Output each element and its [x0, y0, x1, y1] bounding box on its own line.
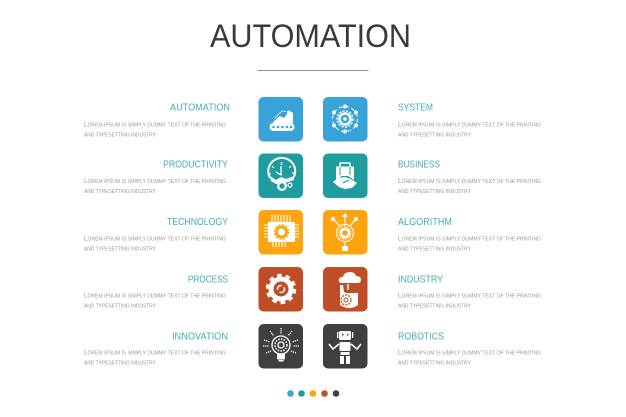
panel: technology text — [84, 216, 228, 252]
panel: technology text: TECHNOLOGY — [167, 216, 228, 228]
panel: technology text: LOREM IPSUM IS SIMPLY DUMMY TEXT OF THE PRINTING — [84, 236, 226, 242]
panel: process text: PROCESS — [188, 274, 228, 286]
panel: business text: LOREM IPSUM IS SIMPLY DUMMY TEXT OF THE PRINTING — [398, 178, 541, 185]
icon: conveyor automation — [258, 97, 303, 142]
panel: innovation text: INNOVATION — [172, 330, 228, 342]
panel: industry text — [398, 274, 541, 310]
panel: robotics text: LOREM IPSUM IS SIMPLY DUMMY TEXT OF THE PRINTING — [398, 350, 541, 356]
panel: innovation text: AND TYPESETTING INDUSTRY — [84, 360, 156, 366]
panel: technology text: AND TYPESETTING INDUSTRY — [84, 246, 156, 252]
panel: system text: AND TYPESETTING INDUSTRY — [398, 132, 471, 138]
panel: productivity text — [84, 158, 228, 195]
panel: industry text: INDUSTRY — [398, 274, 443, 286]
panel: business text — [398, 158, 541, 195]
panel: process text: LOREM IPSUM IS SIMPLY DUMMY TEXT OF THE PRINTING — [84, 292, 226, 300]
icon: process gear — [258, 267, 303, 312]
panel: robotics text — [398, 330, 541, 366]
panel: algorithm text — [398, 216, 541, 252]
panel: process text — [84, 274, 228, 310]
panel: automation text: LOREM IPSUM IS SIMPLY DUMMY TEXT OF THE PRINTING — [84, 122, 226, 128]
icon: technology chip — [258, 210, 303, 254]
icon: system gear ring — [323, 97, 368, 142]
icon: robotics robot — [323, 324, 368, 368]
panel: industry text: LOREM IPSUM IS SIMPLY DUMMY TEXT OF THE PRINTING — [398, 292, 541, 300]
panel: productivity text: LOREM IPSUM IS SIMPLY DUMMY TEXT OF THE PRINTING — [84, 178, 226, 185]
panel: robotics text: ROBOTICS — [398, 330, 444, 342]
title underline — [258, 70, 368, 71]
panel: industry text: AND TYPESETTING INDUSTRY — [398, 304, 471, 310]
panel: business text: BUSINESS — [398, 158, 440, 170]
panel: system text: SYSTEM — [398, 102, 433, 114]
panel: innovation text — [84, 330, 228, 366]
panel: automation text — [84, 102, 230, 138]
panel: robotics text: AND TYPESETTING INDUSTRY — [398, 360, 471, 366]
title: AUTOMATION — [210, 18, 411, 54]
panel: productivity text: AND TYPESETTING INDUSTRY — [84, 189, 156, 195]
panel: algorithm text: ALGORITHM — [398, 216, 452, 228]
icon: industry factory cloud — [323, 267, 368, 312]
panel: productivity text: PRODUCTIVITY — [163, 158, 228, 170]
panel: system text — [398, 102, 541, 138]
panel: automation text: AUTOMATION — [170, 102, 230, 114]
icon: algorithm gear arrows — [323, 210, 368, 254]
panel: business text: AND TYPESETTING INDUSTRY — [398, 189, 471, 195]
panel: process text: AND TYPESETTING INDUSTRY — [84, 304, 156, 310]
panel: automation text: AND TYPESETTING INDUSTRY — [84, 132, 156, 138]
panel: algorithm text: LOREM IPSUM IS SIMPLY DUMMY TEXT OF THE PRINTING — [398, 236, 541, 242]
icon: productivity gauge — [258, 154, 303, 198]
pagination dots — [287, 390, 339, 397]
panel: innovation text: LOREM IPSUM IS SIMPLY DUMMY TEXT OF THE PRINTING — [84, 350, 226, 356]
icon: business briefcase handshake — [323, 154, 368, 198]
icon: innovation light bulb — [258, 324, 303, 368]
panel: system text: LOREM IPSUM IS SIMPLY DUMMY TEXT OF THE PRINTING — [398, 122, 541, 128]
panel: algorithm text: AND TYPESETTING INDUSTRY — [398, 246, 471, 252]
